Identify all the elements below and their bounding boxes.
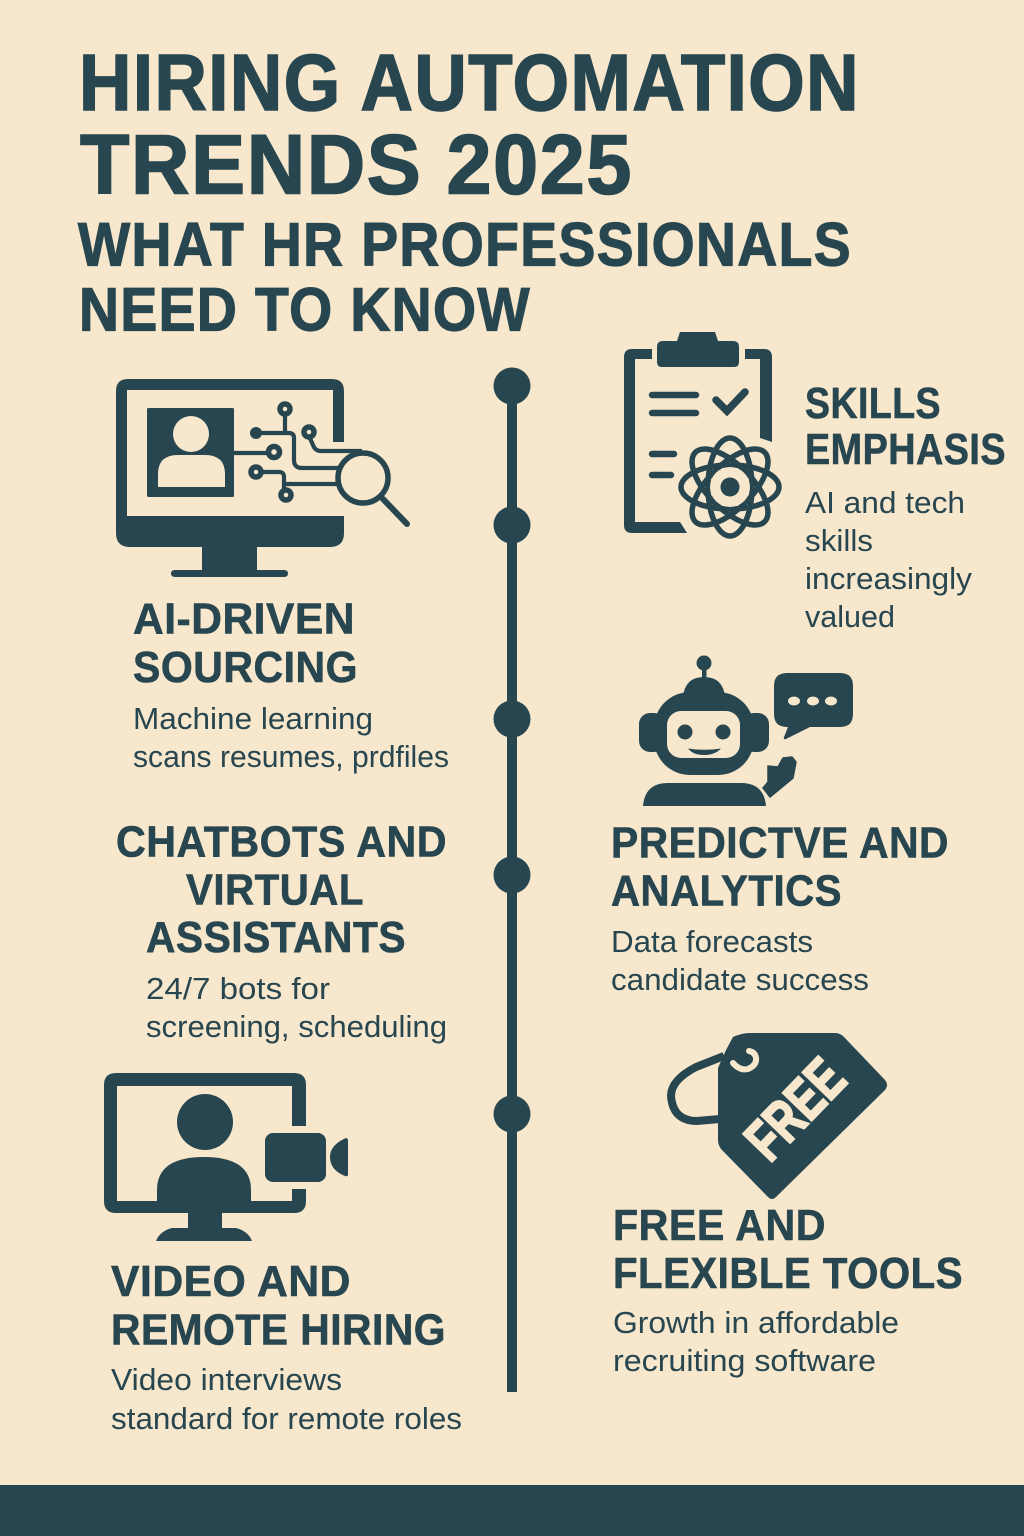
subtitle xyxy=(78,210,852,344)
section: skills emphasis: skills xyxy=(805,523,873,558)
icon: video call xyxy=(104,1073,348,1241)
section: video and remote hiring xyxy=(111,1257,462,1436)
subtitle: WHAT HR PROFESSIONALS xyxy=(78,210,852,278)
section: video and remote hiring: standard for remote roles xyxy=(111,1401,462,1436)
section: skills emphasis: increasingly xyxy=(805,561,972,596)
section: AI-driven sourcing: Machine learning xyxy=(133,701,373,736)
section: free and flexible tools: FREE AND xyxy=(613,1201,826,1250)
footer bar xyxy=(0,1485,1024,1536)
section: predictive analytics xyxy=(611,818,949,997)
section: AI-driven sourcing: SOURCING xyxy=(133,643,358,692)
section: free and flexible tools: Growth in affordable xyxy=(613,1305,899,1340)
section: predictive analytics: candidate success xyxy=(611,962,869,997)
section: skills emphasis: AI and tech xyxy=(805,485,965,520)
section: predictive analytics: PREDICTVE AND xyxy=(611,818,949,868)
section: AI-driven sourcing: AI-DRIVEN xyxy=(133,594,355,644)
section: free and flexible tools: FLEXIBLE TOOLS xyxy=(613,1249,963,1298)
icon: free price tag xyxy=(671,1033,887,1199)
title: HIRING AUTOMATION xyxy=(79,38,860,127)
section: video and remote hiring: VIDEO AND xyxy=(111,1257,351,1306)
icon: robot with speech bubble xyxy=(639,656,853,806)
icon: free price tag: FREE xyxy=(732,1046,858,1173)
section: video and remote hiring: Video interviews xyxy=(111,1362,342,1397)
section: chatbots and virtual assistants: CHATBOTS AND xyxy=(116,818,447,866)
section: free and flexible tools: recruiting software xyxy=(613,1343,876,1378)
subtitle: NEED TO KNOW xyxy=(79,276,531,344)
section: chatbots and virtual assistants: 24/7 bots for xyxy=(146,971,330,1006)
timeline xyxy=(494,368,530,1392)
section: AI-driven sourcing: scans resumes, prdfiles xyxy=(133,739,449,774)
section: chatbots and virtual assistants: ASSISTANTS xyxy=(146,913,406,962)
section: chatbots and virtual assistants: VIRTUAL xyxy=(186,866,364,914)
icon: monitor with candidate and magnifier xyxy=(116,379,407,577)
icon: clipboard with atom xyxy=(624,332,780,537)
section: skills emphasis xyxy=(805,379,1006,634)
section: video and remote hiring: REMOTE HIRING xyxy=(111,1306,446,1354)
title: TRENDS 2025 xyxy=(80,118,633,212)
section: predictive analytics: ANALYTICS xyxy=(611,866,842,916)
title xyxy=(79,38,860,212)
section: AI-driven sourcing xyxy=(133,594,449,774)
section: predictive analytics: Data forecasts xyxy=(611,924,813,959)
section: chatbots and virtual assistants xyxy=(116,818,447,1044)
section: skills emphasis: valued xyxy=(805,599,895,634)
section: skills emphasis: SKILLS xyxy=(805,379,941,428)
section: free and flexible tools xyxy=(613,1201,963,1378)
section: chatbots and virtual assistants: screening, scheduling xyxy=(146,1009,447,1044)
